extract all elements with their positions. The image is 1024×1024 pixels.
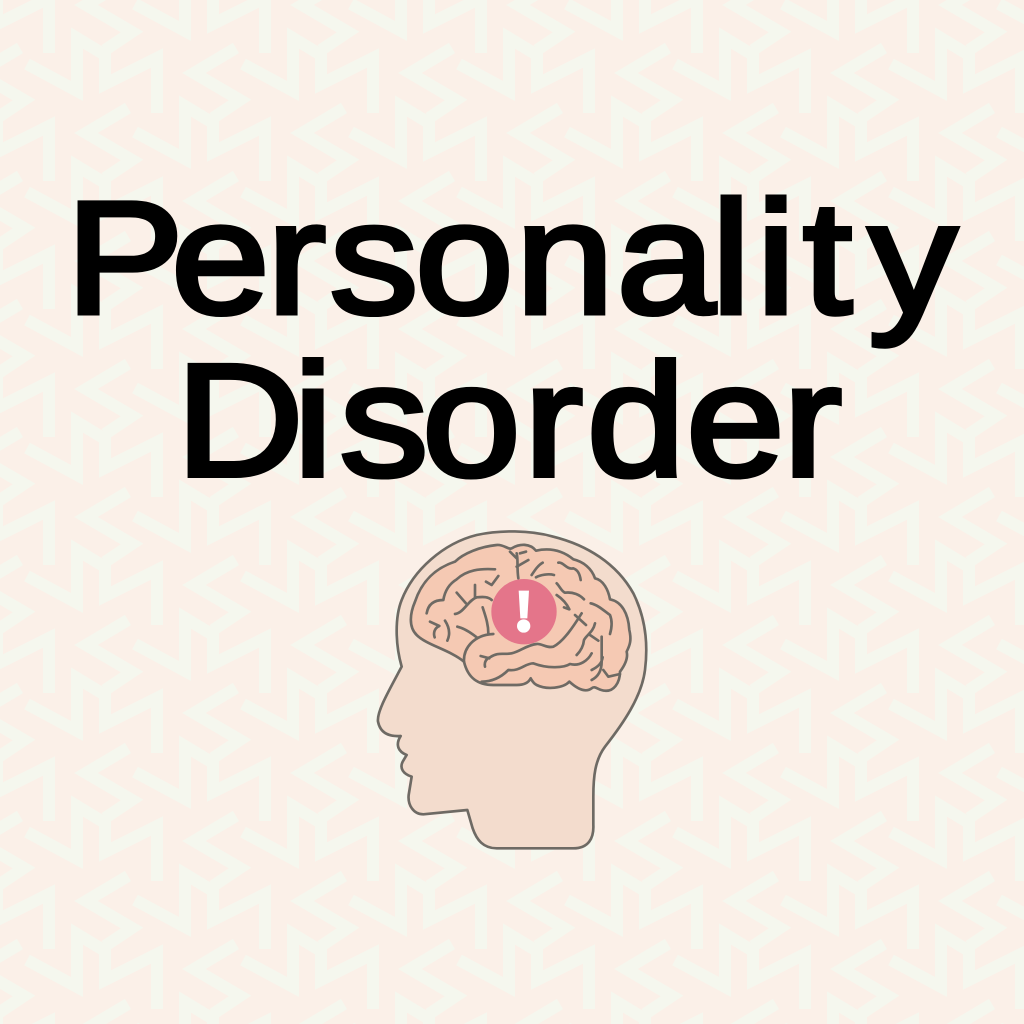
brain folds [464, 634, 493, 662]
brain outline [411, 545, 630, 691]
head silhouette [378, 531, 646, 848]
icon: head with brain and alert [378, 531, 646, 848]
title: Disorder [176, 330, 842, 510]
brain [411, 545, 630, 691]
title: Personality [66, 168, 958, 347]
title [66, 168, 958, 510]
exclamation mark [517, 591, 530, 633]
alert badge [491, 579, 557, 644]
